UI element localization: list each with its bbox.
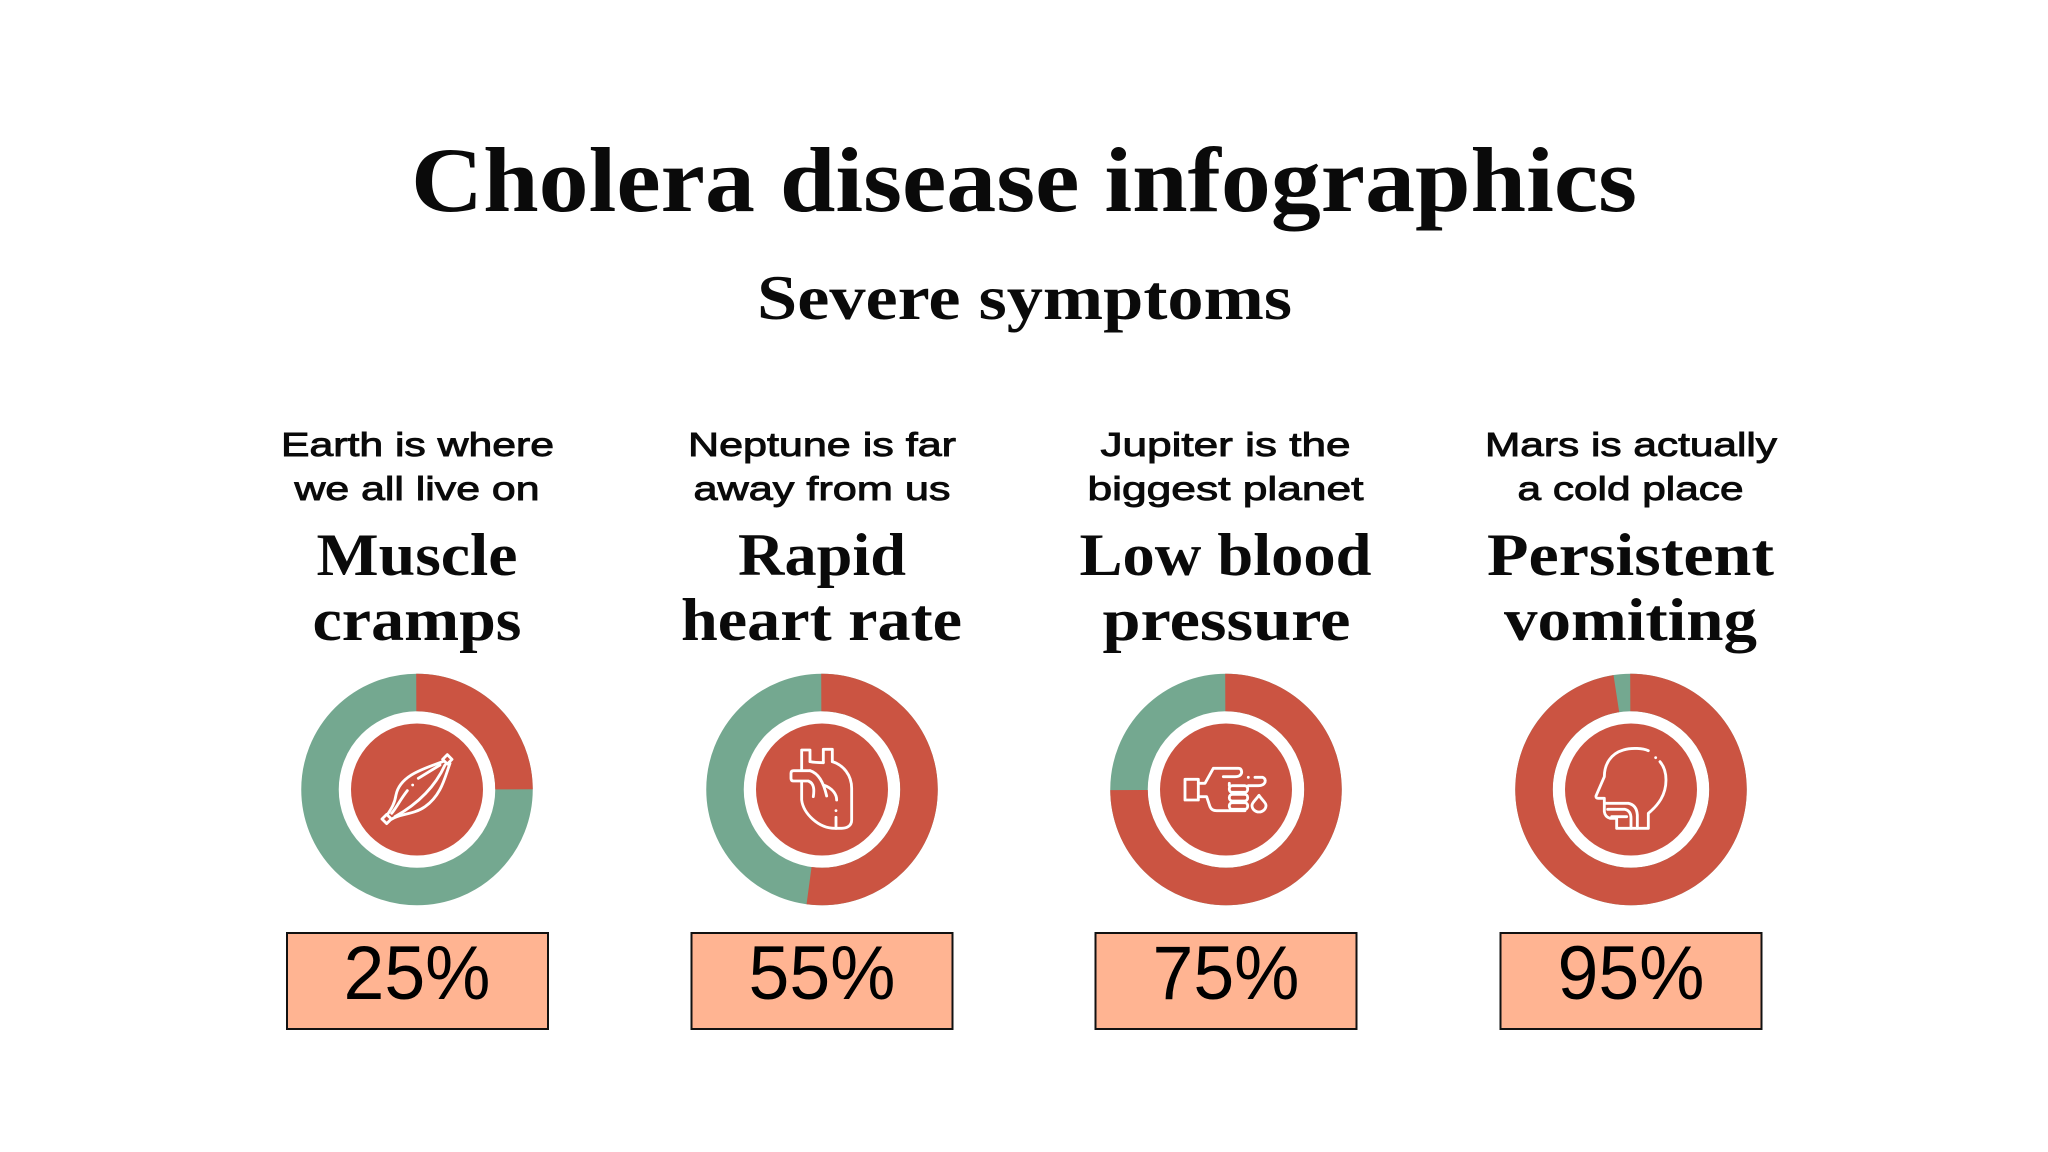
value box: 55%: [692, 931, 952, 1029]
heading: rapid heart rate: heart rate: [681, 587, 962, 653]
description: muscle cramps: Earth is where: [281, 426, 554, 463]
panel: low blood pressure: [1080, 426, 1372, 1029]
heading: persistent vomiting: [1487, 522, 1774, 653]
value box: 95%: [1500, 931, 1762, 1029]
heading: rapid heart rate: Rapid: [738, 522, 906, 588]
donut chart: 25%: [320, 692, 514, 886]
heading: low blood pressure: Low blood: [1080, 522, 1372, 588]
description: muscle cramps: [281, 426, 554, 507]
icon: hand with drop: [1185, 768, 1266, 812]
donut chart: 75%: [1129, 692, 1323, 886]
description: low blood pressure: Jupiter is the: [1100, 426, 1350, 463]
description: persistent vomiting: [1485, 426, 1778, 507]
heading: persistent vomiting: vomiting: [1504, 587, 1757, 653]
value box: 75%: [1096, 931, 1356, 1029]
heading: rapid heart rate: [681, 522, 962, 653]
heading: muscle cramps: cramps: [312, 587, 522, 653]
donut chart: 95%: [1534, 692, 1728, 886]
heading: muscle cramps: [312, 522, 522, 653]
panel: persistent vomiting: [1485, 426, 1778, 1029]
description: rapid heart rate: away from us: [694, 470, 950, 507]
icon: heart: [791, 749, 852, 828]
heading: low blood pressure: [1080, 522, 1372, 653]
subtitle: Severe symptoms: [757, 263, 1292, 333]
heading: persistent vomiting: Persistent: [1487, 522, 1774, 588]
description: low blood pressure: biggest planet: [1088, 470, 1364, 507]
description: rapid heart rate: [688, 426, 956, 507]
panel: muscle cramps: [281, 426, 554, 1029]
panel: rapid heart rate: [681, 426, 962, 1029]
description: muscle cramps: we all live on: [293, 470, 540, 507]
value box: 55%: 55%: [748, 931, 896, 1016]
description: persistent vomiting: Mars is actually: [1485, 426, 1778, 463]
value box: 25%: 25%: [344, 931, 490, 1016]
value box: 95%: 95%: [1558, 931, 1704, 1016]
description: rapid heart rate: Neptune is far: [688, 426, 956, 463]
icon: head and throat: [1596, 748, 1666, 828]
heading: low blood pressure: pressure: [1102, 587, 1350, 653]
heading: muscle cramps: Muscle: [316, 522, 518, 588]
value box: 75%: 75%: [1152, 931, 1300, 1016]
value box: 25%: [287, 931, 548, 1029]
icon: muscle: [382, 755, 452, 824]
title: Cholera disease infographics: [411, 129, 1637, 231]
description: low blood pressure: [1088, 426, 1364, 507]
donut chart: 55%: [725, 692, 919, 886]
description: persistent vomiting: a cold place: [1518, 470, 1744, 507]
